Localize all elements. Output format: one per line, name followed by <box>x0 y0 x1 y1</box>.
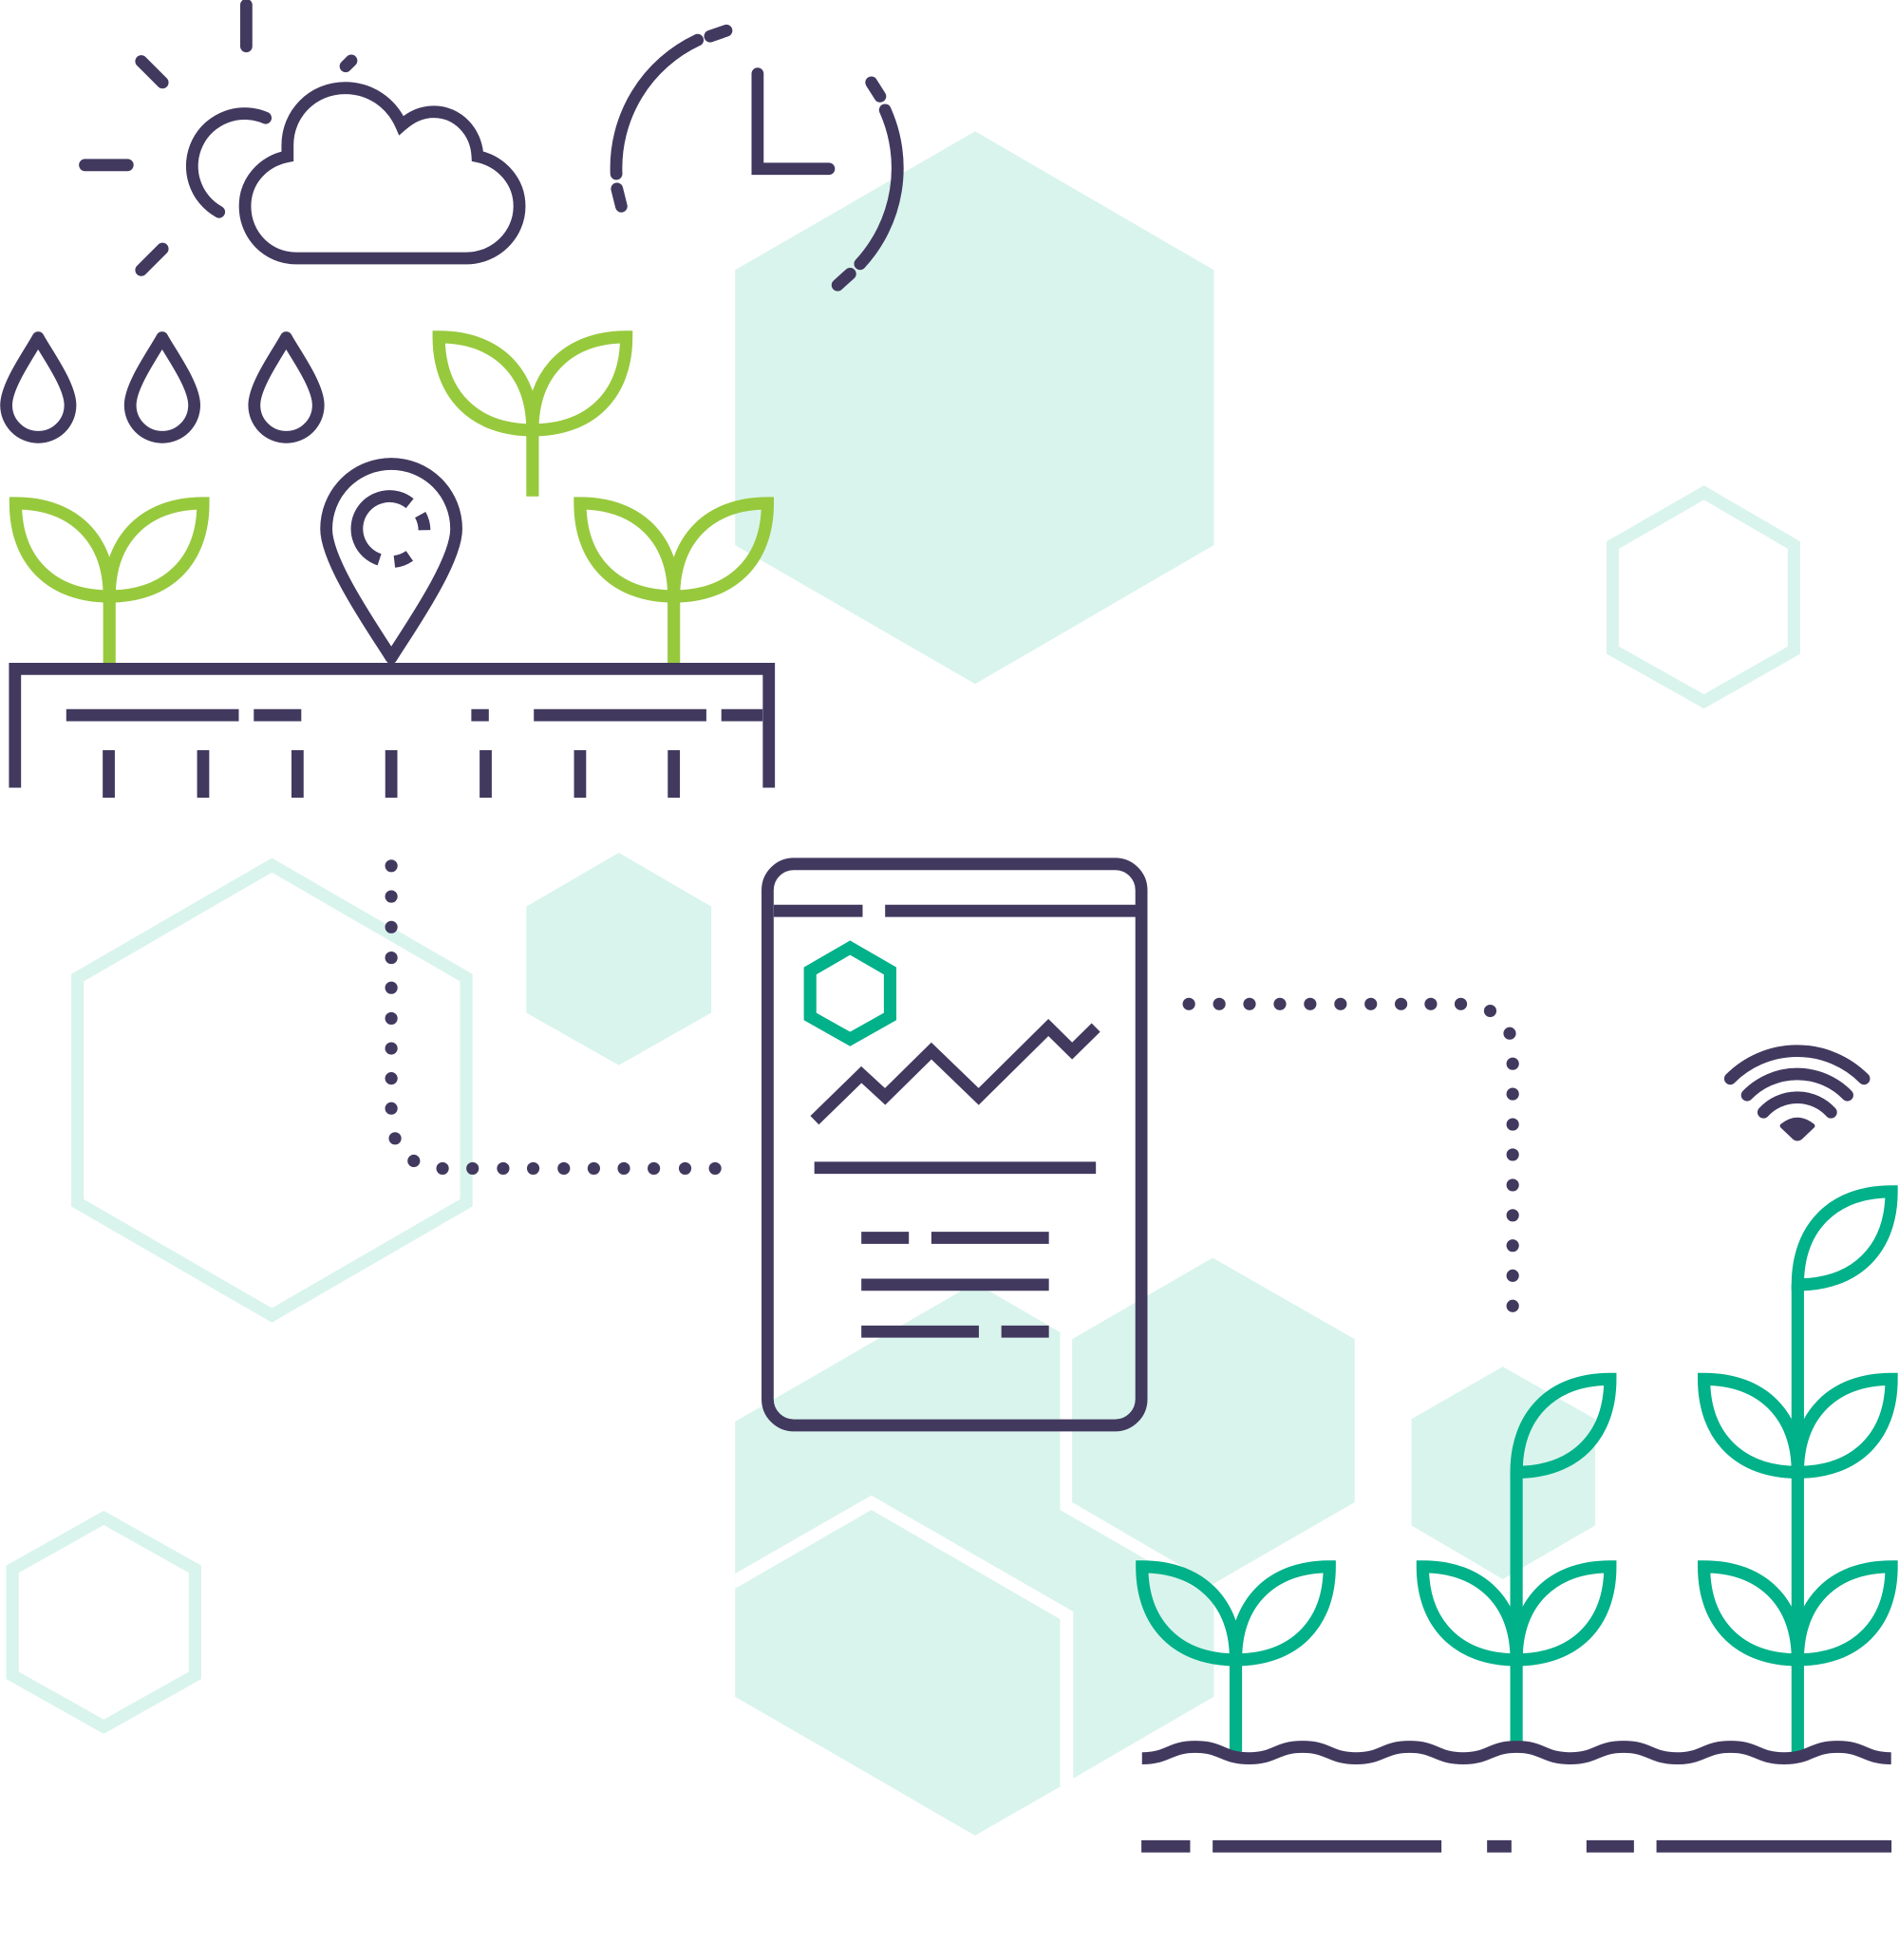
hexagon: base filled <box>735 1283 1213 1836</box>
line chart <box>815 1027 1096 1121</box>
pin dashed inner ring <box>357 497 424 561</box>
hexagon gap: white band right <box>1061 1251 1375 1612</box>
hexagon: outline top right <box>1612 493 1794 702</box>
icon: teal plant medium <box>1422 1379 1610 1752</box>
soil dashes <box>66 710 762 720</box>
icon: wifi signal <box>1730 1051 1864 1140</box>
drop 2 <box>130 338 195 437</box>
hexagon: lower filled <box>735 1510 1061 1836</box>
icon: teal hexagon <box>810 948 890 1039</box>
icon: clock <box>616 30 897 285</box>
sun rays and arc <box>85 5 351 270</box>
icon: teal plant small <box>1142 1567 1329 1752</box>
icon: location pin <box>327 463 457 658</box>
wifi wedge <box>1780 1118 1814 1140</box>
dotted connector left <box>385 859 722 1175</box>
clock hands <box>758 74 829 169</box>
hexagon: large outline left <box>78 865 466 1315</box>
report lines <box>815 1168 1096 1331</box>
hexagon: small filled right <box>1412 1366 1595 1579</box>
pin outline <box>327 463 457 658</box>
icon: sun behind cloud <box>85 5 519 270</box>
tablet body <box>767 864 1141 1425</box>
icon: teal plant tall <box>1704 1192 1891 1754</box>
icon: green sprout right <box>580 503 767 663</box>
icon: green sprout top <box>439 337 627 497</box>
tablet with report <box>767 864 1141 1425</box>
hexagon: right filled <box>1072 1258 1355 1584</box>
bed frame <box>15 669 769 787</box>
icon: water drops <box>7 338 318 437</box>
icon: green sprout left <box>15 503 203 663</box>
hexagon gap: white band lower <box>735 1496 1073 1800</box>
hexagon: small filled centre <box>526 853 711 1065</box>
drop 1 <box>7 338 70 437</box>
soil bed with roots <box>15 669 769 798</box>
hexagon: outline bottom left <box>12 1517 195 1726</box>
dotted connector right <box>1183 998 1519 1312</box>
water wave line <box>1142 1747 1891 1759</box>
cloud <box>245 88 519 258</box>
tablet header line <box>774 906 1137 915</box>
ground dashes <box>1141 1841 1891 1851</box>
drop 3 <box>254 338 318 437</box>
wifi arcs <box>1730 1051 1864 1112</box>
clock dashed ring <box>616 30 897 285</box>
hexagon: large filled top <box>735 131 1213 684</box>
hexagon cluster bottom centre <box>735 1251 1375 1836</box>
root ticks <box>109 750 674 798</box>
